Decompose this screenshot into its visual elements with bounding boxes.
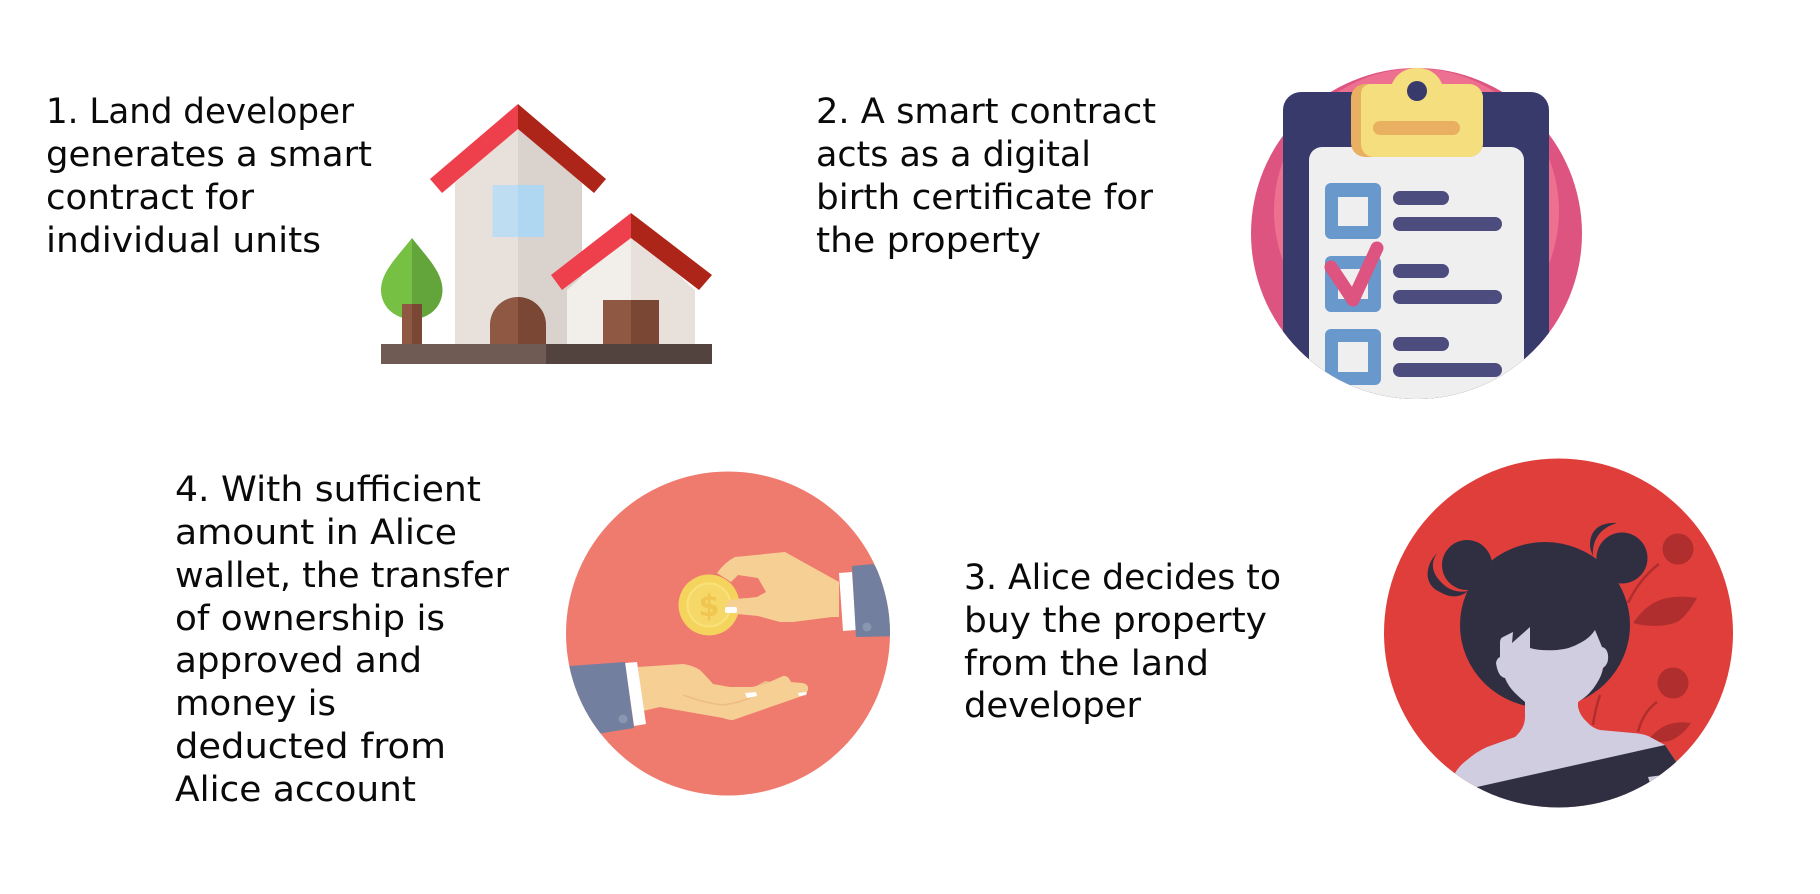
icon part: ground xyxy=(381,344,712,364)
icon: Alice portrait xyxy=(1384,458,1733,830)
text: step 3: buy the property xyxy=(964,601,1267,641)
icon: hands exchanging coin xyxy=(555,472,900,796)
text: step 4: money is xyxy=(175,684,336,724)
text: step 1: individual units xyxy=(46,221,321,261)
text: step 2: acts as a digital xyxy=(816,135,1091,175)
clip xyxy=(1351,68,1483,157)
hair xyxy=(1428,523,1648,708)
upper hand with coin xyxy=(678,552,900,637)
text: step 4: Alice account xyxy=(175,770,416,810)
off-shoulder dress xyxy=(1476,745,1676,808)
lower receiving hand xyxy=(569,662,808,734)
text: step 4: amount in Alice xyxy=(175,513,457,553)
text: step 3: from the land xyxy=(964,644,1209,684)
text: step 3: 3. Alice decides to xyxy=(964,558,1281,598)
checklist lines xyxy=(1393,191,1502,377)
icon part: large house xyxy=(430,104,606,344)
text: step 2: 2. A smart contract xyxy=(816,92,1156,132)
text: step 4: approved and xyxy=(175,641,422,681)
text: step 1: contract for xyxy=(46,178,255,218)
text: step 3 xyxy=(964,558,1281,726)
icon part: small house xyxy=(551,213,712,344)
text: step 1: 1. Land developer xyxy=(46,92,355,132)
skin xyxy=(1455,627,1677,815)
text: step 1: generates a smart xyxy=(46,135,372,175)
icon part: tree xyxy=(381,238,442,344)
text: step 4: of ownership is xyxy=(175,599,445,639)
text: step 2: birth certificate for xyxy=(816,178,1154,218)
text: step 4 xyxy=(175,470,510,810)
icon: clipboard checklist xyxy=(1251,68,1582,432)
check mark xyxy=(1331,248,1377,300)
text: step 3: developer xyxy=(964,686,1142,726)
text: step 1 xyxy=(46,92,372,261)
icon: houses and tree xyxy=(381,104,712,364)
upper hand with coin: $ xyxy=(699,589,719,624)
text: step 4: deducted from xyxy=(175,727,446,767)
checklist boxes xyxy=(1325,183,1381,385)
background foliage xyxy=(1593,534,1697,742)
text: step 4: wallet, the transfer xyxy=(175,556,510,596)
text: step 2 xyxy=(816,92,1156,261)
text: step 2: the property xyxy=(816,221,1041,261)
text: step 4: 4. With sufficient xyxy=(175,470,481,510)
